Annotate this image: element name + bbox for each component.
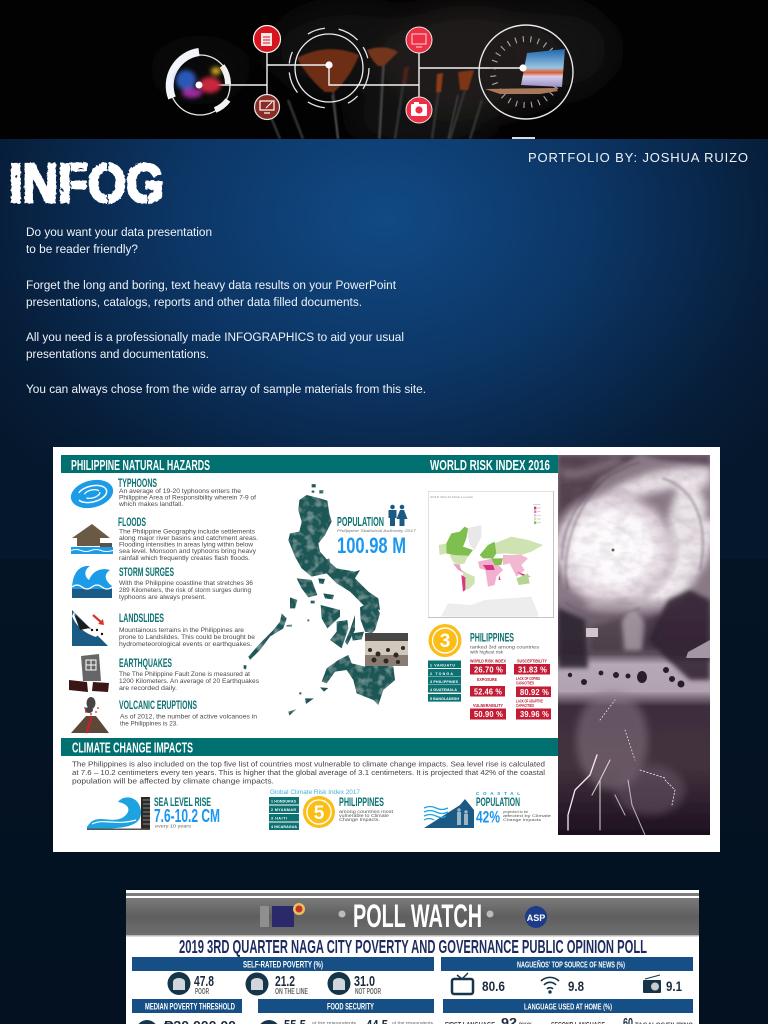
intro text block: to be reader friendly? [26,242,138,256]
section: top source of news: 80.6 [482,978,505,994]
intro text block: You can always chose from the wide array of sample materials from this site. [26,382,426,396]
text: floods [118,517,258,562]
stat: global climate risk index [269,789,394,830]
chart: world risk levels map [428,491,554,618]
section: top source of news: 9.1 [666,978,682,994]
icon: earthquake [69,654,109,692]
text: climate change body [72,762,545,786]
stats: world risk index indicators: 31.83 % [518,666,547,674]
table: top five world risk countries: 2 TONGA [430,672,453,676]
stat: global climate risk index: Change Impacts. [339,817,380,822]
intro text block: All you need is a professionally made INFOGRAPHICS to aid your usual [26,330,404,344]
logo: right [525,906,547,928]
text: volcanic eruptions [119,700,258,728]
stats: world risk index indicators: 50.90 % [474,710,503,719]
text: volcanic eruptions: As of 2012, the number of active volcanoes in [120,714,258,720]
stats: world risk index indicators: EXPOSURE [477,677,497,682]
chart: world risk levels map: 2016 World Risk Levels [430,495,474,499]
icon: ink ring [170,52,230,115]
text: typhoons: which makes landfall. [118,501,183,508]
text: earthquakes [119,658,259,692]
stat: coastal population: 42% [476,808,500,826]
table: top five world risk countries: 1 VANUATU [430,663,455,667]
text: climate change body: at 7.6 – 10.2 centimeters every ten years. This is higher that the global average of 3.1 centimeters. It is projected that 42% of the coastal [72,770,545,777]
stat: population [337,505,417,558]
intro text block: presentations and documentations. [26,347,209,361]
badge: rank 3: 3 [440,631,450,652]
heading bar: climate change impacts: CLIMATE CHANGE IMPACTS [72,740,193,756]
stats: world risk index indicators: LACK OF ADAPTIVE [516,698,543,704]
text: typhoons: An average of 19-20 typhoons enters the [119,488,242,495]
map: Philippines [244,484,395,716]
stat: coastal population: COASTAL [476,791,520,796]
text: storm surges: 289 Kilometers, the risk of storm surges during [119,587,252,594]
icon: television [452,973,473,994]
banner: Poll Watch [126,893,699,936]
icon: document [254,26,280,52]
stat: global climate risk index: 2 MYANMAR [271,808,296,812]
text: floods: FLOODS [118,517,146,529]
text: Philippines rank: ranked 3rd among countries [470,644,539,650]
chart legend [533,505,541,524]
intro text block [26,225,426,396]
panel: Poll Watch infographic [126,890,699,1024]
badge: rank 5: 5 [314,803,325,824]
stat: population: Philippine Statistical Authority 2017 [337,529,417,533]
author credit: PORTFOLIO BY: JOSHUA RUIZO [528,150,748,165]
heading bar: natural hazards and world risk index [61,455,558,474]
icon: storm surge [72,566,112,598]
text: Philippines rank: with highest risk [470,650,504,654]
text: earthquakes: EARTHQUAKES [119,658,172,670]
section: self-rated poverty: POOR [195,987,209,996]
heading bar: climate change impacts [61,738,558,756]
table: top five world risk countries: 4 GUATEMALA [430,688,457,692]
section: self-rated poverty: 31.0 [354,973,375,990]
text: Philippines rank [470,632,539,654]
stat: population: 100.98 M [337,533,406,558]
stat: sea level rise [87,797,220,830]
text: storm surges: With the Philippine coastline that stretches 36 [119,580,254,587]
icon: edit screen [254,94,280,120]
text: floods: along major river basins and catchment areas. [119,535,258,542]
section: median poverty threshold: MEDIAN POVERTY THRESHOLD [145,1002,235,1012]
intro text block: Do you want your data presentation [26,225,212,239]
brushes [268,47,482,139]
text: landslides: prone to Landslides. This could be brought be [119,634,256,641]
stats: world risk index indicators: CAPACITIES [516,703,534,708]
section: top source of news [441,957,693,994]
text: landslides: hydrometeorological events or earthquakes. [119,641,252,648]
badge: rank 3 [428,624,462,657]
icon: volcano [71,697,109,733]
stats: world risk index indicators: 26.70 % [474,666,503,674]
stat: global climate risk index: vulnerable to Climate [339,813,390,818]
stats: world risk index indicators: 52.46 % [474,688,502,696]
stat: coastal population: affected by Climate [503,813,552,818]
section: self-rated poverty: SELF-RATED POVERTY (%) [243,960,323,970]
stat: global climate risk index: among countries most [339,809,394,814]
stat: coastal population: POPULATION [476,797,520,809]
stat: coastal population: projected to be [503,809,529,814]
icon: monitor [406,27,432,53]
text: floods: Flooding intensities in areas lying within below [119,542,254,548]
section: self-rated poverty [132,957,434,996]
intro text block: presentations, catalogs, reports and other data filled documents. [26,295,362,309]
title: INFOG: INFOG [9,152,164,214]
stats: world risk index indicators: 80.92 % [520,688,549,697]
text: climate change body: The Philippines is also included on the top five list of countries most vulnerable to climate change impacts. Sea level rise is calculated [72,762,545,768]
icon: wifi [541,977,559,993]
text: earthquakes: 1200 Kilometers. An average of 20 Earthquakes [119,678,259,685]
text: Philippines rank: PHILIPPINES [470,632,514,644]
stat: sea level rise: 7.6-10.2 CM [154,806,220,826]
photo: evacuees on the map [365,633,408,666]
stat: global climate risk index: Global Climate Risk Index 2017 [270,789,360,796]
icon: typhoon [68,476,116,512]
stat: global climate risk index: 1 HONDURAS [271,800,297,804]
stat: sea level rise: SEA LEVEL RISE [154,797,211,809]
icon: people [388,505,408,526]
stat: global climate risk index: 3 HAITI [271,816,287,820]
stats: world risk index indicators: VULNERABILITY [473,703,503,708]
connector lines [202,53,520,97]
stats: world risk index indicators: 39.96 % [520,710,549,719]
text: typhoons: TYPHOONS [118,478,157,490]
section: food security [258,999,434,1024]
text: landslides [119,613,256,648]
icon: radio [643,975,661,993]
stat: global climate risk index: PHILIPPINES [339,797,384,809]
text: earthquakes: The The Philippine Fault Zone is measured at [119,671,250,678]
icon: camera [406,97,432,123]
icon: landslide [72,610,108,646]
section: top source of news: 9.8 [568,978,584,994]
section: self-rated poverty: ON THE LINE [275,987,308,996]
text: earthquakes: are recorded daily. [119,685,177,692]
stat: global climate risk index: 4 NICARAGUA [271,825,297,829]
stat: coastal population: Change Impacts [503,817,541,822]
text: landslides: Mountainous terrains in the Philippines are [119,627,245,634]
text: volcanic eruptions: VOLCANIC ERUPTIONS [119,700,197,712]
text: floods: rainfall which frequently creates flash floods. [119,555,250,562]
text: landslides: LANDSLIDES [119,613,164,625]
panel: Philippine natural hazards infographic [53,447,720,852]
icon: flood [71,524,113,554]
text: climate change body: population will be affected by climate change impacts. [72,778,274,786]
text: typhoons [118,478,256,508]
text: storm surges: typhoons are always present. [119,594,206,601]
section: self-rated poverty: 47.8 [194,973,214,990]
section: top source of news: NAGUEÑOS' TOP SOURCE OF NEWS (%) [517,960,625,970]
header banner with brushes and connected icons [0,0,768,150]
text: floods: sea level. Monsoon and typhoons bring heavy [119,548,257,555]
heading bar: natural hazards and world risk index: PHILIPPINE NATURAL HAZARDS [71,457,210,474]
stat: sea level rise: every 10 years [155,824,191,828]
text: volcanic eruptions: the Philippines is 23. [120,720,178,728]
icon: laptop ring [479,25,573,119]
section: self-rated poverty: NOT POOR [355,987,381,996]
section: language used at home: LANGUAGE USED AT HOME (%) [524,1002,612,1012]
stats: world risk index indicators: WORLD RISK INDEX [470,658,506,664]
stat: population: POPULATION [337,514,384,529]
section: food security: FOOD SECURITY [327,1002,374,1012]
table: top five world risk countries: 3 PHILIPPINES [430,680,459,684]
text: floods: The Philippine Geography include settlements [119,528,255,536]
stats: world risk index indicators: SUSCEPTIBILITY [517,658,547,664]
heading bar: natural hazards and world risk index: WORLD RISK INDEX 2016 [430,457,550,474]
table: top five world risk countries [428,660,461,702]
banner: Poll Watch: POLL WATCH [353,898,482,934]
stats: world risk index indicators: LACK OF COPING [516,676,540,681]
logo: left [260,903,305,927]
icon: fan brush ring [289,28,369,108]
icon: wave and ruler [87,797,150,830]
logo: right: ASP [527,913,545,923]
stats: world risk index indicators [470,658,551,720]
section: self-rated poverty: 21.2 [275,973,295,990]
text: typhoons: Philippine Area of Responsibility wherein 7-9 of [119,494,256,502]
section: median poverty threshold [132,999,242,1024]
intro text block: Forget the long and boring, text heavy data results on your PowerPoint [26,278,397,292]
text: storm surges [119,567,254,601]
section: language used at home [443,999,693,1024]
photo: typhoon, flood and lights collage [545,455,710,835]
stats: world risk index indicators: CAPACITIES [516,680,534,686]
table: top five world risk countries: 5 BANGLADESH [430,697,459,701]
stat: coastal population [424,791,552,828]
icon: coast and people [424,799,474,828]
text: storm surges: STORM SURGES [119,567,174,579]
